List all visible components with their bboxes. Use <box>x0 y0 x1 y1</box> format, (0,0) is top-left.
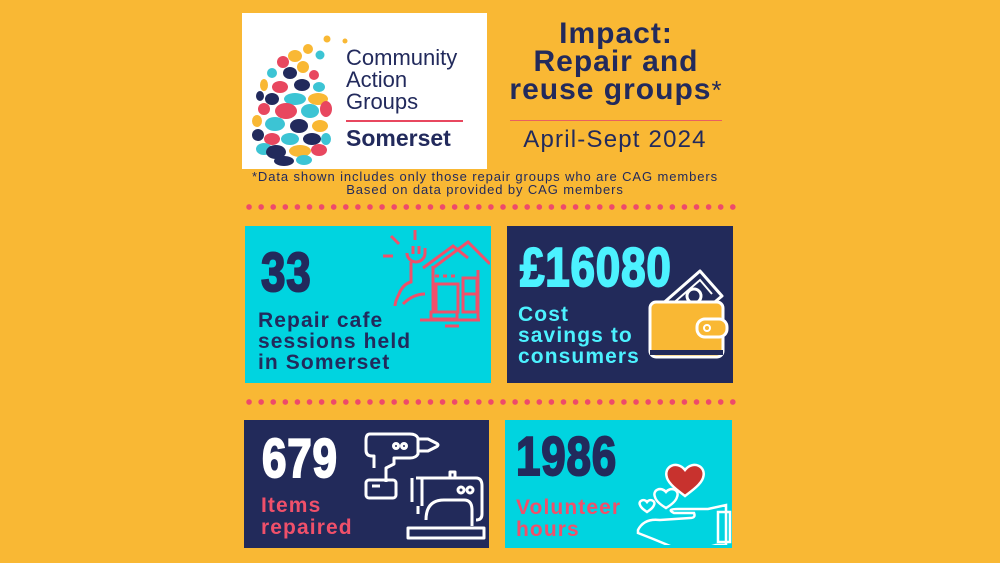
title: reuse groups* <box>509 73 723 106</box>
panel: repair cafe sessions: sessions held <box>258 330 411 353</box>
title <box>509 17 723 106</box>
icon: wallet with money <box>648 269 728 358</box>
logo text <box>346 45 458 114</box>
icon: hand with hearts <box>636 464 732 545</box>
panel: cost savings: savings to <box>518 324 633 347</box>
title: Repair and <box>533 45 699 78</box>
subtitle date: April-Sept 2024 <box>523 126 707 153</box>
footnote <box>252 169 718 196</box>
logo panel <box>242 13 487 169</box>
panel: volunteer hours: Volunteer <box>516 496 621 519</box>
footnote: Based on data provided by CAG members <box>346 182 624 196</box>
panel: volunteer hours <box>505 420 732 548</box>
logo mark <box>252 36 348 166</box>
panel: items repaired: 679 <box>262 427 338 489</box>
panel: volunteer hours: hours <box>516 518 580 541</box>
panel: items repaired: Items <box>261 494 321 517</box>
panel: repair cafe sessions <box>245 226 491 383</box>
icon: repair house <box>383 230 490 328</box>
panel: cost savings: Cost <box>518 303 569 326</box>
panel: items repaired <box>244 420 489 548</box>
panel: repair cafe sessions: 33 <box>261 241 312 303</box>
icon: drill and sewing machine <box>364 432 486 540</box>
logo text: Groups <box>346 89 418 114</box>
logo text: Action <box>346 67 407 92</box>
panel: volunteer hours: 1986 <box>516 425 617 487</box>
footnote: *Data shown includes only those repair groups who are CAG members <box>252 169 718 184</box>
logo text: Community <box>346 45 457 70</box>
panel: repair cafe sessions: in Somerset <box>258 351 390 374</box>
logo panel: Somerset <box>346 125 451 151</box>
title: Impact: <box>559 17 673 50</box>
panel: cost savings: consumers <box>518 345 640 368</box>
panel: repair cafe sessions: Repair cafe <box>258 309 383 332</box>
panel: items repaired: repaired <box>261 516 353 539</box>
panel: cost savings <box>507 226 733 383</box>
panel: cost savings: £16080 <box>520 236 672 298</box>
